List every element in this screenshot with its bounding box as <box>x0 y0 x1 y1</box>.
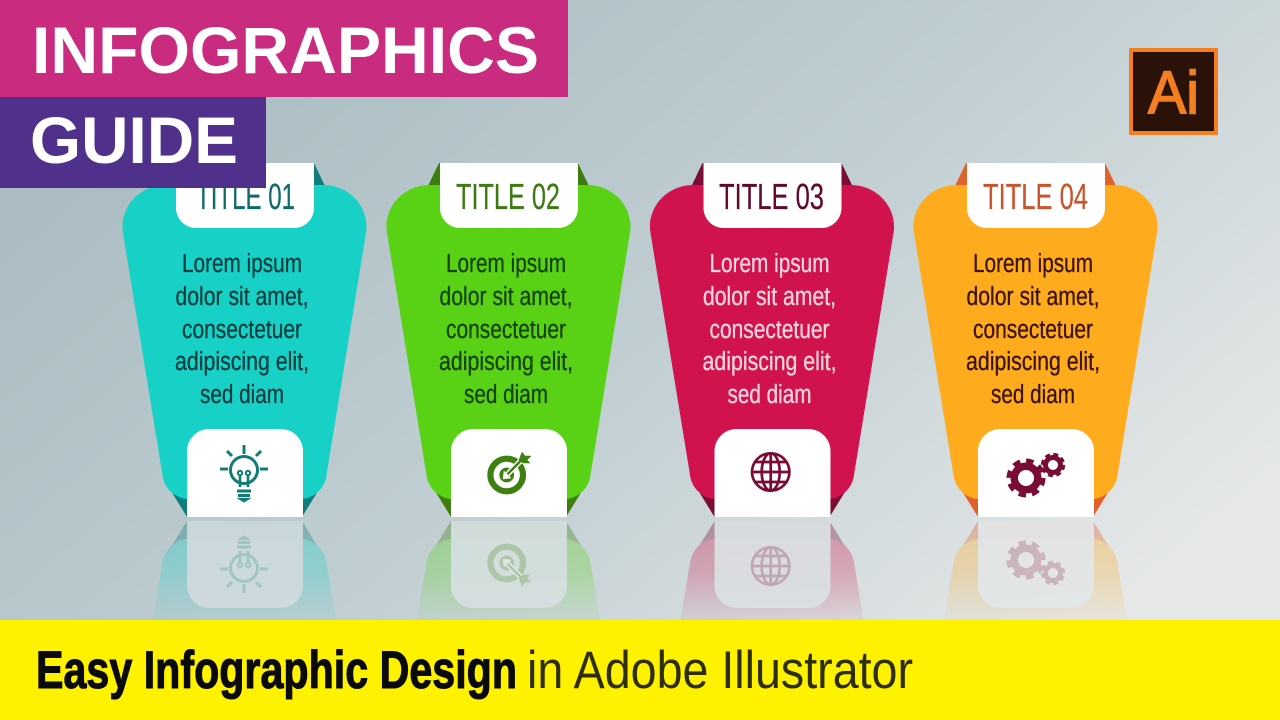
card 3 body <box>650 185 894 499</box>
card 3 reflected icon <box>752 547 790 585</box>
card 4 text: dolor sit amet, <box>966 283 1100 311</box>
card 2 title tab <box>440 163 578 228</box>
card 2 reflection <box>417 521 600 620</box>
card 1 reflected icon <box>220 536 268 593</box>
card 4 reflected icon <box>1009 543 1064 584</box>
card 2 reflected icon <box>490 547 531 586</box>
card 2 folds <box>427 163 590 517</box>
card 4 text: adipiscing elit, <box>966 348 1100 376</box>
heading banner: guide <box>0 97 266 188</box>
card 1 body <box>122 185 367 499</box>
card 3 folds <box>690 163 854 517</box>
card 2 text: consectetuer <box>446 316 566 344</box>
card 4 folds <box>954 163 1117 517</box>
card 4 title: TITLE 04 <box>983 176 1088 217</box>
card 4 title tab <box>967 163 1105 228</box>
icon: gears <box>1009 454 1064 495</box>
card 1 text: consectetuer <box>182 316 302 344</box>
footer banner <box>0 620 1280 720</box>
card 3 text: adipiscing elit, <box>702 348 836 376</box>
card 1 text <box>175 250 309 409</box>
panel: card 4 <box>913 163 1158 620</box>
heading banner: guide: GUIDE <box>30 103 238 177</box>
card 1 folds <box>163 163 326 517</box>
card 2 body <box>386 185 631 499</box>
card 1 reflection <box>153 521 336 620</box>
card 2 text: Lorem ipsum <box>446 250 566 278</box>
card 3 text: dolor sit amet, <box>703 283 836 311</box>
card 2 title: TITLE 02 <box>456 176 560 217</box>
card 3 text: sed diam <box>728 381 812 409</box>
panel: card 2 <box>386 163 631 620</box>
card 4 icon box <box>978 429 1094 517</box>
card 4 reflected white box <box>978 521 1094 608</box>
card 3 title tab <box>704 163 842 228</box>
card 2 text: sed diam <box>464 381 548 409</box>
card 3 icon box <box>714 429 830 517</box>
card 4 text: Lorem ipsum <box>973 250 1093 278</box>
card 1 reflected white box <box>187 521 303 608</box>
card 4 reflection <box>944 521 1127 620</box>
card 4 text: sed diam <box>991 381 1075 409</box>
card 1 text: adipiscing elit, <box>175 348 309 376</box>
card 4 body <box>913 185 1158 499</box>
card 1 title tab <box>176 163 314 228</box>
card 3 text: consectetuer <box>710 316 830 344</box>
card 2 reflected white box <box>451 521 567 608</box>
panel: card 1 <box>122 163 367 620</box>
icon: target <box>490 452 531 491</box>
card 2 icon box <box>451 429 567 517</box>
card 3 text: Lorem ipsum <box>710 250 830 278</box>
card 1 text: Lorem ipsum <box>182 250 302 278</box>
card 3 title: TITLE 03 <box>719 176 824 217</box>
footer light title: in Adobe Illustrator <box>527 641 913 700</box>
card 1 title: TITLE 01 <box>196 176 295 217</box>
icon: globe <box>752 453 790 491</box>
panel: card 3 <box>650 163 894 620</box>
card 2 text: adipiscing elit, <box>439 348 573 376</box>
heading banner: infographics <box>0 0 568 97</box>
card 4 text: consectetuer <box>973 316 1093 344</box>
icon: Adobe Illustrator logo <box>1131 50 1216 133</box>
card 3 text <box>702 250 836 409</box>
icon: Adobe Illustrator logo: Ai <box>1148 59 1199 126</box>
card 3 reflected white box <box>714 521 830 608</box>
card 2 text <box>439 250 573 409</box>
card 1 text: sed diam <box>200 381 284 409</box>
heading banner: infographics: INFOGRAPHICS <box>32 13 539 87</box>
card 1 icon box <box>187 429 303 517</box>
card 4 text <box>966 250 1100 409</box>
icon: light bulb <box>220 445 268 502</box>
footer bold title: Easy Infographic Design <box>36 641 517 700</box>
card 1 text: dolor sit amet, <box>176 283 308 311</box>
card 2 text: dolor sit amet, <box>440 283 572 311</box>
card 3 reflection <box>680 521 864 620</box>
